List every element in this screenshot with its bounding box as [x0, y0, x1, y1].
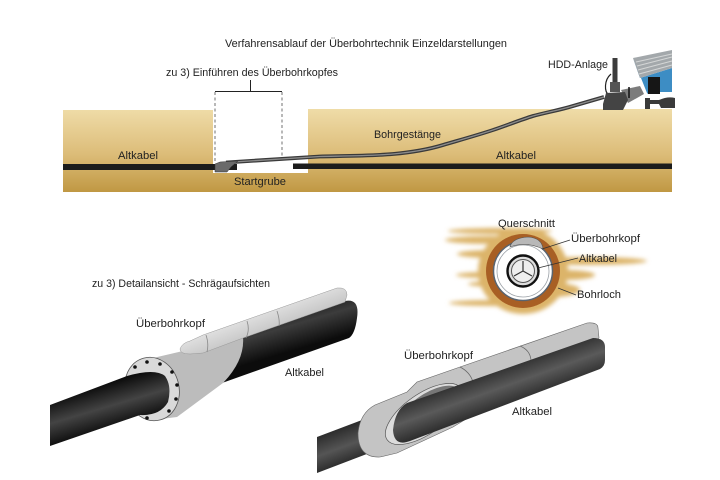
label: Altkabel left: Altkabel — [118, 150, 158, 162]
title: Verfahrensablauf der Überbohrtechnik Einzeldarstellungen — [225, 38, 507, 50]
soil right of the pit — [308, 109, 672, 192]
inner sleeve line — [497, 245, 549, 297]
label: Querschnitt: Querschnitt — [498, 218, 555, 230]
panel: ground section — [63, 109, 672, 192]
hose — [605, 74, 611, 95]
mast — [612, 58, 618, 88]
label: Bohrloch: Bohrloch — [577, 289, 621, 301]
label: zu 3) Detailansicht: zu 3) Detailansicht - Schrägaufsichten — [92, 278, 270, 290]
overdrilling sleeve — [494, 242, 552, 300]
soil halo streaks — [445, 228, 647, 314]
carriage — [621, 86, 644, 103]
machine door — [648, 77, 660, 94]
sleeve seams — [460, 346, 531, 382]
panel: cross section — [445, 218, 647, 314]
cable — [393, 338, 605, 443]
label: Überbohrkopf: Überbohrkopf — [571, 233, 641, 245]
drill rod — [226, 97, 604, 162]
old cable cross section — [508, 256, 538, 286]
cable in front — [50, 372, 169, 446]
soil below the start pit — [213, 173, 308, 192]
label: Altkabel: Altkabel — [579, 253, 617, 265]
head bump — [510, 237, 543, 249]
soil left of the pit — [63, 110, 213, 192]
label: Altkabel: Altkabel — [512, 406, 552, 418]
HDD rig — [603, 50, 675, 110]
dashed detail frame with bracket — [215, 80, 282, 163]
label: HDD-Anlage: HDD-Anlage — [548, 59, 608, 71]
old cable right — [293, 164, 672, 169]
overdrilling head in pit — [215, 161, 238, 172]
label: Altkabel: Altkabel — [285, 367, 324, 379]
rig base — [603, 92, 628, 110]
label: Altkabel right: Altkabel — [496, 150, 536, 162]
sleeve rail — [180, 288, 347, 354]
rail seams — [206, 311, 279, 352]
machine roof — [633, 50, 672, 78]
panel: detail view 2 — [317, 323, 605, 473]
label: Startgrube: Startgrube — [234, 176, 286, 188]
sleeve body — [153, 337, 243, 420]
label: Überbohrkopf: Überbohrkopf — [136, 318, 206, 330]
sleeve — [358, 323, 599, 457]
sleeve ring — [118, 351, 186, 427]
machine housing — [633, 58, 672, 94]
label: zu 3) Einführen: zu 3) Einführen des Überbohrkopfes — [166, 67, 338, 79]
opening interior — [387, 376, 467, 446]
label: Überbohrkopf: Überbohrkopf — [404, 350, 474, 362]
panel: detail view 1 — [50, 288, 358, 446]
opening — [376, 372, 472, 456]
borehole — [486, 234, 560, 308]
ring bolts — [133, 360, 179, 420]
cable entering sleeve — [317, 420, 372, 473]
old cable left — [63, 164, 237, 170]
leader lines — [538, 240, 578, 295]
label: Bohrgestänge: Bohrgestänge — [374, 129, 441, 141]
cable behind the head — [222, 301, 358, 383]
mast base — [610, 82, 620, 92]
machine feet — [645, 97, 675, 109]
